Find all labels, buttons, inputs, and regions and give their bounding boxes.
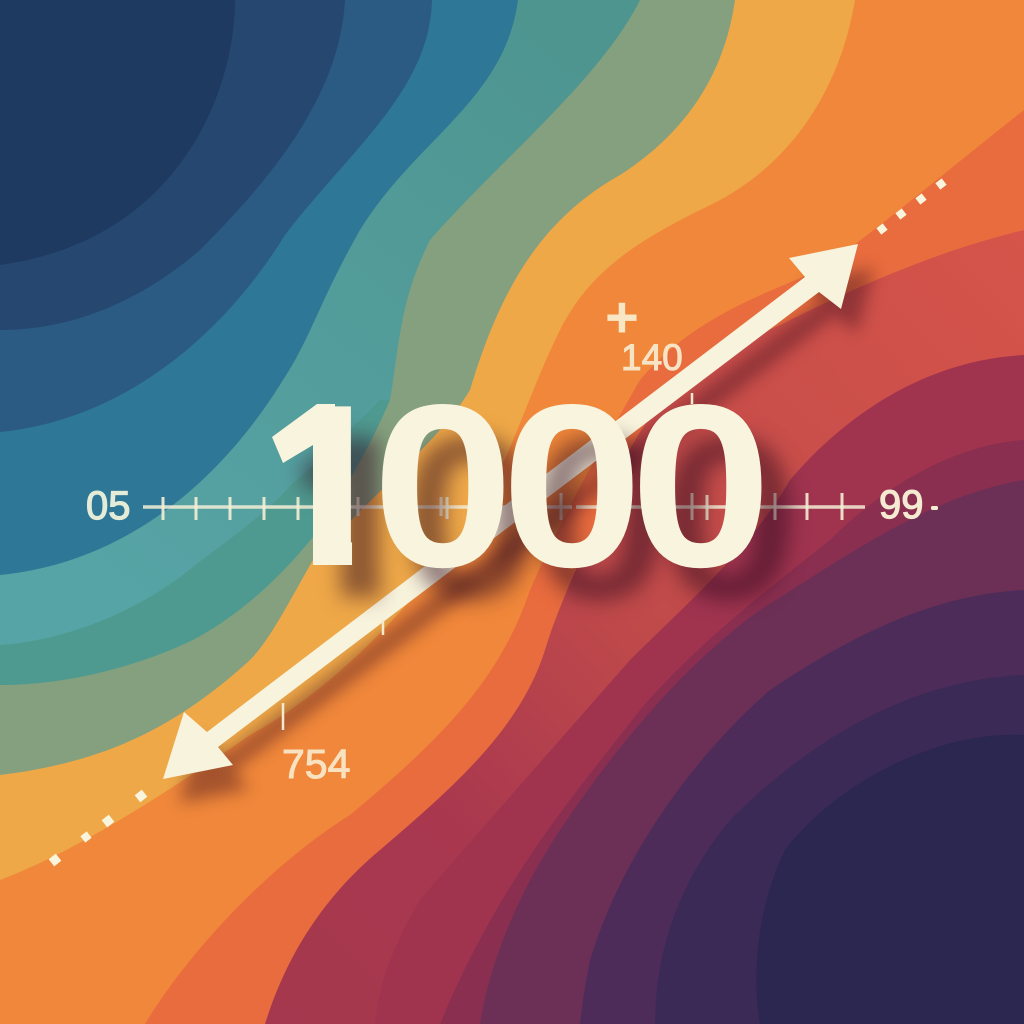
dotted extension lower left bbox=[49, 790, 147, 866]
arrow: diagonal double-headed bbox=[163, 244, 858, 779]
title number: 1000: 000 bbox=[372, 356, 772, 615]
plus sign: + bbox=[605, 285, 639, 350]
dot after 99 bbox=[931, 506, 938, 510]
dotted extension upper right bbox=[876, 178, 947, 235]
number line with ticks bbox=[143, 493, 865, 520]
label: 754: 754 bbox=[282, 741, 350, 787]
label: 140: 140 bbox=[621, 337, 683, 378]
small ticks on the arrow bbox=[283, 393, 692, 730]
label: 99: 99 bbox=[879, 483, 924, 527]
title number: 1000: 1 bbox=[246, 356, 403, 615]
title number: 1000 bbox=[272, 404, 803, 614]
label: 05: 05 bbox=[86, 484, 130, 528]
